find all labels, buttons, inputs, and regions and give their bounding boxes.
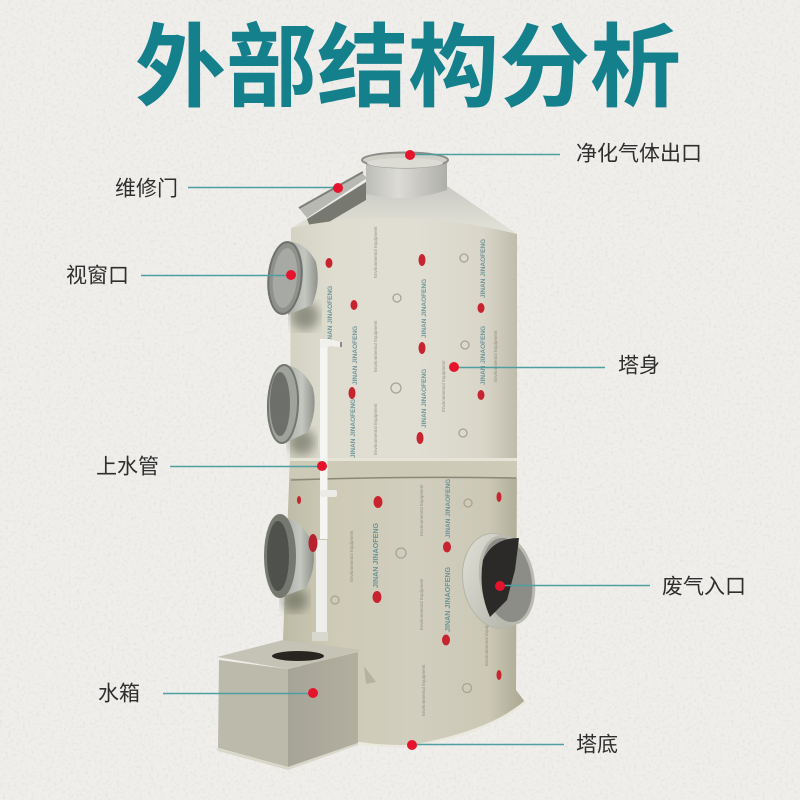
callout: viewing window: 视窗口 — [66, 264, 129, 288]
printed vertical brand text: JINAN JINAOFENG — [372, 522, 380, 588]
printed vertical brand text: JINAN JINAOFENG — [444, 566, 452, 632]
water inlet pipe — [312, 339, 342, 641]
tower illustration — [216, 152, 540, 770]
printed vertical brand text: Environmental Equipment — [421, 664, 426, 716]
printed vertical brand text: Environmental Equipment — [441, 360, 446, 412]
tower lower body — [283, 458, 525, 746]
printed logos — [297, 254, 502, 680]
base rim — [358, 702, 525, 746]
callout: tower body: 塔身 — [618, 354, 660, 378]
waste gas inlet — [455, 528, 540, 634]
printed vertical brand text: JINAN JINAOFENG — [421, 279, 428, 338]
outlet collar — [362, 152, 448, 198]
tower upper body — [290, 218, 517, 460]
callout: tower base — [407, 734, 618, 756]
callout: water inlet pipe — [96, 456, 327, 478]
callout: maintenance door: 维修门 — [115, 178, 178, 200]
printed vertical brand text: Environmental Equipment — [349, 530, 354, 582]
printed vertical brand text: JINAN JINAOFENG — [421, 369, 428, 428]
maintenance door — [299, 172, 367, 232]
printed vertical brand text: Environmental Equipment — [484, 614, 489, 666]
recycling marks — [331, 254, 472, 692]
stiffening band — [290, 458, 517, 480]
callout: maintenance door — [115, 178, 343, 200]
callout: purified gas outlet: 净化气体出口 — [576, 142, 702, 166]
printed vertical brand text: JINAN JINAOFENG — [327, 286, 334, 345]
printed vertical brand text: Environmental Equipment — [493, 330, 498, 382]
water tank — [216, 640, 376, 770]
callout: tower base: 塔底 — [576, 734, 618, 756]
callout: water tank: 水箱 — [98, 682, 140, 706]
printed vertical brand text: Environmental Equipment — [419, 578, 424, 630]
viewing port 2 — [267, 365, 315, 455]
tower cone roof — [291, 186, 517, 234]
callout: waste gas inlet: 废气入口 — [662, 576, 746, 598]
printed vertical brand text — [327, 226, 498, 716]
printed vertical brand text: JINAN JINAOFENG — [480, 326, 487, 385]
callout: waste gas inlet — [495, 576, 746, 598]
callout: viewing window — [66, 264, 296, 288]
printed vertical brand text: JINAN JINAOFENG — [352, 326, 359, 385]
title: 外部结构分析 — [135, 18, 681, 119]
printed vertical brand text: Environmental Equipment — [419, 484, 424, 536]
callout: water tank — [98, 682, 318, 706]
callout: purified gas outlet — [405, 142, 702, 166]
valve — [308, 534, 318, 552]
viewing port 3 — [265, 515, 314, 612]
printed vertical brand text: JINAN JINAOFENG — [350, 399, 357, 458]
printed vertical brand text: Environmental Equipment — [373, 320, 378, 372]
callout: tower body — [449, 354, 660, 378]
viewing port 1 — [265, 241, 319, 330]
printed vertical brand text: JINAN JINAOFENG — [480, 239, 487, 298]
printed vertical brand text: Environmental Equipment — [373, 403, 378, 455]
printed vertical brand text: Environmental Equipment — [373, 226, 378, 278]
callout: water inlet pipe: 上水管 — [96, 456, 159, 478]
printed vertical brand text: JINAN JINAOFENG — [445, 479, 452, 538]
